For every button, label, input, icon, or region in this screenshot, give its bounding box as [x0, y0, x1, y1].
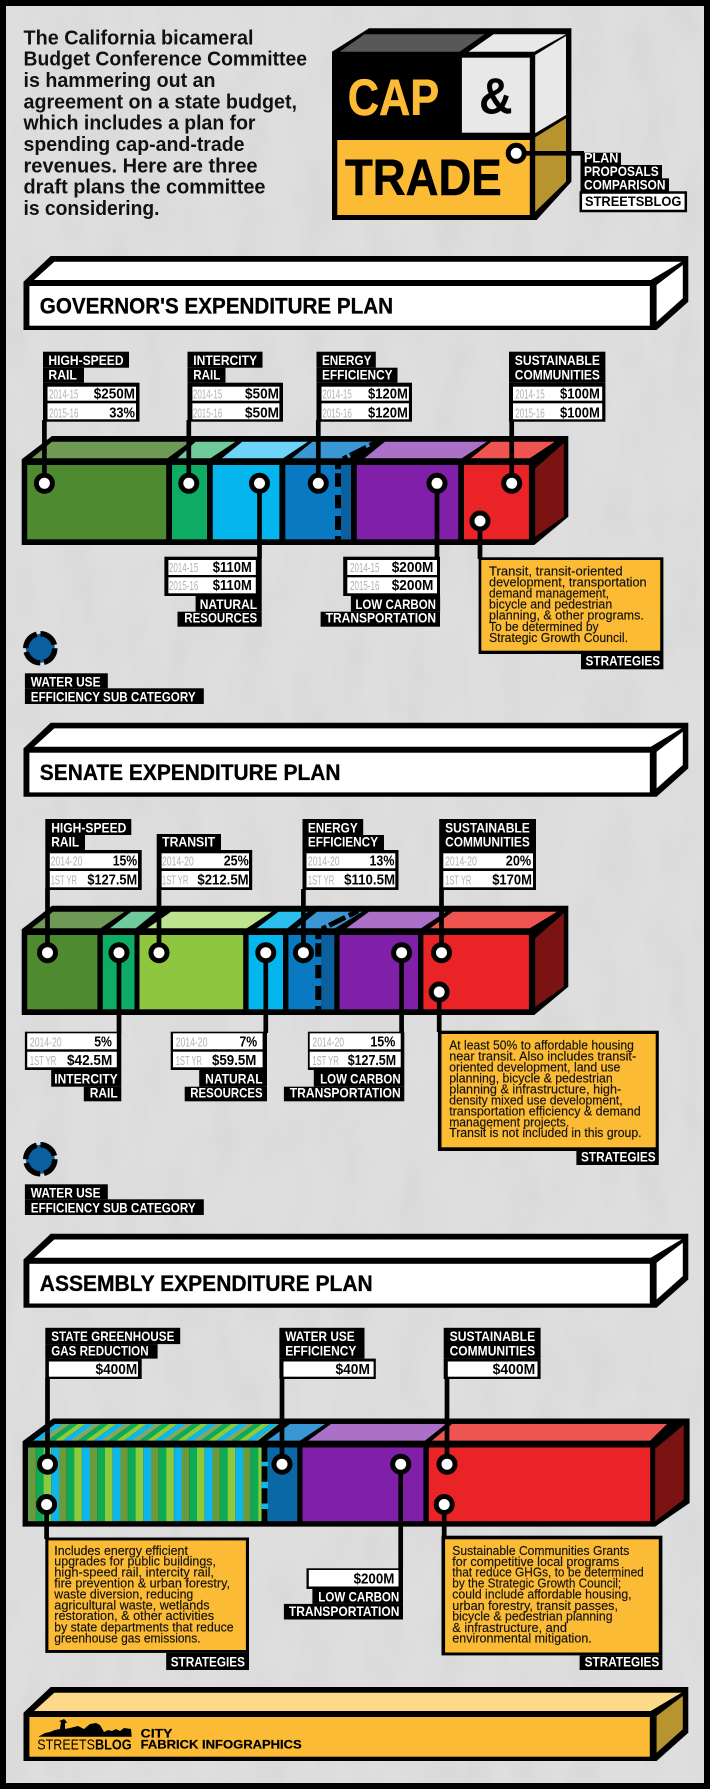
label: governor natural resources: 2015-16 [169, 578, 198, 593]
callout: governor strategies: To be determined by [489, 619, 599, 634]
callout: assembly greenhouse strategies: high-speed rail, intercity rail, [54, 1565, 214, 1580]
callout: senate strategies [438, 1031, 659, 1165]
callout: assembly sustainable communities strategies: STRATEGIES [585, 1653, 659, 1669]
label: senate natural resources: RESOURCES [190, 1085, 263, 1101]
footer credit text: CITY [141, 1726, 172, 1740]
intro text block: revenues. Here are three [24, 154, 258, 177]
label: senate natural resources: 2014-20 [176, 1035, 207, 1050]
label: senate energy efficiency [302, 819, 398, 890]
label: senate intercity rail: 1ST YR [30, 1053, 56, 1068]
label: senate natural resources: 7% [240, 1034, 257, 1051]
intro text block: is considering. [24, 197, 160, 220]
callout: assembly greenhouse strategies [45, 1538, 249, 1670]
chart: governor's plan bar [22, 420, 568, 559]
label: governor high-speed rail: RAIL [48, 366, 77, 382]
subtitle tags: plan proposals comparison streetsblog: COMPARISON [584, 176, 666, 192]
label: assembly sustainable communities: COMMUNITIES [450, 1342, 535, 1358]
label: senate transit [157, 834, 252, 890]
label: governor low carbon transportation: 2015-16 [350, 578, 379, 593]
label: senate sustainable communities: SUSTAINABLE [445, 819, 530, 835]
label: senate energy efficiency: $110.5M [344, 872, 395, 889]
label: governor high-speed rail: 2014-15 [49, 386, 78, 401]
callout: assembly sustainable communities strategies: urban forestry, transit passes, [452, 1598, 618, 1613]
label: senate low carbon transportation: TRANSPORTATION [290, 1085, 401, 1101]
intro text block: Budget Conference Committee [24, 48, 307, 71]
label: assembly water use efficiency: EFFICIENCY [285, 1342, 357, 1358]
label: assembly low carbon transportation [284, 1568, 403, 1620]
callout: senate strategies: planning & infrastructure, high- [449, 1081, 621, 1096]
heading: assembly expenditure plan [24, 1234, 688, 1308]
label: senate transit: $212.5M [197, 872, 249, 889]
footer logo: streetsblog skyline: BLOG [95, 1736, 132, 1753]
subtitle tags: plan proposals comparison streetsblog [580, 150, 686, 211]
callout: senate strategies: STRATEGIES [581, 1148, 656, 1164]
label: governor sustainable communities: COMMUNITIES [515, 366, 600, 382]
label: senate low carbon transportation [284, 1032, 404, 1101]
label: governor natural resources: RESOURCES [184, 610, 257, 626]
callout: assembly greenhouse strategies: upgrades for public buildings, [54, 1553, 216, 1568]
legend: water use efficiency sub category [25, 634, 204, 705]
label: governor low carbon transportation: $200M [392, 559, 433, 576]
subtitle tags: plan proposals comparison streetsblog: STREETSBLOG [585, 193, 681, 209]
label: assembly state greenhouse gas reduction: GAS REDUCTION [51, 1342, 149, 1358]
label: senate energy efficiency: 1ST YR [308, 873, 334, 888]
label: governor natural resources [164, 557, 262, 627]
callout: assembly sustainable communities strategies: & infrastructure, and [452, 1620, 567, 1635]
label: assembly state greenhouse gas reduction [45, 1328, 180, 1379]
label: senate energy efficiency: ENERGY [308, 819, 358, 835]
callout: assembly sustainable communities strategies: bicycle & pedestrian planning [452, 1609, 613, 1624]
label: senate high-speed rail: 1ST YR [51, 873, 77, 888]
label: senate transit: 2014-20 [162, 854, 194, 869]
title logo: cap and trade box: & [479, 67, 513, 124]
subtitle tags: plan proposals comparison streetsblog: PLAN [584, 150, 618, 166]
label: senate sustainable communities: COMMUNITIES [445, 834, 530, 850]
label: senate low carbon transportation: 15% [370, 1034, 395, 1051]
label: assembly sustainable communities: $400M [493, 1361, 535, 1378]
label: governor energy efficiency: 2015-16 [322, 405, 352, 420]
label: governor low carbon transportation [321, 557, 440, 627]
label: governor sustainable communities: 2014-15 [515, 386, 545, 401]
label: assembly state greenhouse gas reduction: STATE GREENHOUSE [51, 1328, 174, 1344]
callout: senate strategies: oriented development, land use [449, 1059, 620, 1074]
intro text block [23, 26, 307, 220]
label: senate energy efficiency: 13% [370, 853, 394, 870]
label: senate high-speed rail: $127.5M [87, 872, 137, 889]
label: senate sustainable communities: $170M [492, 872, 532, 889]
footer logo: streetsblog skyline: STREETS [37, 1736, 95, 1753]
label: assembly low carbon transportation: LOW CARBON [318, 1589, 399, 1605]
label: senate intercity rail [25, 1032, 121, 1101]
label: governor intercity rail: RAIL [193, 366, 221, 382]
label: senate high-speed rail: RAIL [51, 834, 80, 850]
label: governor intercity rail: $50M [245, 385, 279, 402]
title logo: cap and trade box [332, 28, 584, 220]
callout: assembly sustainable communities strategies: by the Strategic Growth Council; [452, 1576, 621, 1591]
intro text block: which includes a plan for [23, 112, 256, 135]
label: governor sustainable communities: $100M [560, 385, 600, 402]
footer logo: streetsblog skyline [37, 1719, 132, 1753]
label: governor low carbon transportation: $200M [392, 577, 433, 594]
callout: assembly greenhouse strategies: restoration, & other activities [54, 1608, 215, 1623]
intro text block: spending cap-and-trade [24, 133, 244, 156]
callout: governor strategies: demand management, [489, 586, 609, 601]
label: governor high-speed rail: $250M [94, 385, 135, 402]
callout: assembly greenhouse strategies: waste diversion, reducing [53, 1586, 193, 1601]
callout: assembly greenhouse strategies: Includes energy efficient [54, 1543, 188, 1558]
label: governor energy efficiency: 2014-15 [322, 386, 352, 401]
label: assembly state greenhouse gas reduction: $400M [96, 1361, 137, 1378]
callout: governor strategies: planning, & other programs. [489, 607, 644, 622]
callout: assembly sustainable communities strategies: Sustainable Communities Grants [452, 1543, 630, 1558]
label: governor low carbon transportation: TRANSPORTATION [326, 610, 436, 626]
callout: senate strategies: near transit. Also includes transit- [449, 1049, 636, 1064]
heading: governor's expenditure plan: GOVERNOR'S EXPENDITURE PLAN [40, 293, 393, 318]
callout: assembly sustainable communities strategies: that reduce GHGs, to be determined [452, 1565, 644, 1580]
legend: water use efficiency sub category (senate): EFFICIENCY SUB CATEGORY [31, 1199, 196, 1215]
callout: assembly sustainable communities strategies: could include affordable housing, [452, 1586, 632, 1601]
label: governor low carbon transportation: 2014-15 [350, 560, 379, 575]
heading: assembly expenditure plan: ASSEMBLY EXPENDITURE PLAN [40, 1271, 373, 1296]
label: governor natural resources: $110M [213, 577, 252, 594]
footer credit text [141, 1726, 302, 1751]
callout: senate strategies: Transit is not included in this group. [449, 1125, 642, 1140]
callout: assembly greenhouse strategies: agricultural waste, wetlands [54, 1597, 210, 1612]
callout: senate strategies: management projects. [449, 1115, 569, 1130]
intro text block: draft plans the committee [24, 176, 266, 199]
callout: assembly sustainable communities strategies: for competitive local programs [452, 1554, 620, 1569]
label: senate intercity rail: RAIL [90, 1085, 118, 1101]
label: assembly water use efficiency: WATER USE [285, 1328, 355, 1344]
label: senate transit: 25% [224, 853, 249, 870]
label: assembly low carbon transportation: $200M [354, 1571, 394, 1588]
chart: senate plan bar [22, 889, 568, 1033]
label: governor sustainable communities: $100M [560, 404, 600, 421]
label: governor energy efficiency: ENERGY [322, 352, 372, 368]
callout: assembly greenhouse strategies: greenhouse gas emissions. [54, 1631, 201, 1646]
label: governor natural resources: $110M [213, 559, 252, 576]
legend: water use efficiency sub category (senate) [25, 1145, 204, 1215]
label: assembly water use efficiency [279, 1328, 376, 1379]
legend: water use efficiency sub category: WATER USE [31, 674, 100, 690]
heading: governor's expenditure plan [24, 256, 688, 330]
callout: senate strategies: density mixed use development, [449, 1092, 623, 1107]
footer credit text: FABRICK INFOGRAPHICS [141, 1737, 302, 1751]
label: governor energy efficiency [316, 352, 412, 422]
chart: assembly plan bar [23, 1378, 690, 1570]
callout: assembly sustainable communities strategies: environmental mitigation. [452, 1631, 592, 1646]
label: governor natural resources: NATURAL [200, 596, 258, 612]
label: senate low carbon transportation: 2014-20 [312, 1035, 344, 1050]
label: governor high-speed rail: 33% [109, 404, 135, 421]
callout: assembly greenhouse strategies: fire prevention & urban forestry, [54, 1576, 230, 1591]
label: senate natural resources: $59.5M [212, 1052, 256, 1069]
label: governor intercity rail: INTERCITY [193, 352, 258, 368]
label: senate sustainable communities: 20% [506, 853, 531, 870]
heading: senate expenditure plan: SENATE EXPENDITURE PLAN [40, 760, 341, 785]
label: governor sustainable communities [509, 352, 605, 422]
label: governor intercity rail: 2014-15 [193, 386, 222, 401]
label: senate low carbon transportation: LOW CARBON [320, 1070, 401, 1086]
intro text block: The California bicameral [24, 26, 254, 49]
label: governor energy efficiency: $120M [368, 404, 408, 421]
label: governor low carbon transportation: LOW CARBON [355, 596, 436, 612]
intro text block: is hammering out an [24, 69, 216, 92]
label: senate intercity rail: INTERCITY [54, 1070, 118, 1086]
label: senate sustainable communities: 1ST YR [445, 873, 471, 888]
legend: water use efficiency sub category: EFFICIENCY SUB CATEGORY [31, 689, 196, 705]
label: governor high-speed rail: 2015-16 [49, 405, 78, 420]
label: senate intercity rail: 2014-20 [30, 1035, 62, 1050]
label: assembly water use efficiency: $40M [336, 1361, 370, 1378]
heading: senate expenditure plan [24, 723, 688, 797]
label: senate high-speed rail: HIGH-SPEED [51, 819, 126, 835]
label: assembly sustainable communities [444, 1328, 541, 1379]
label: senate high-speed rail: 2014-20 [51, 854, 82, 869]
callout: assembly sustainable communities strategies [442, 1536, 662, 1670]
callout: senate strategies: transportation efficiency & demand [449, 1103, 641, 1118]
label: senate natural resources [171, 1032, 267, 1101]
label: governor intercity rail: 2015-16 [193, 405, 222, 420]
legend: water use efficiency sub category (senate): WATER USE [31, 1185, 100, 1201]
callout: governor strategies: Transit, transit-oriented [489, 563, 623, 578]
label: senate high-speed rail [45, 819, 142, 890]
callout: senate strategies: At least 50% to affordable housing [449, 1037, 634, 1052]
callout: governor strategies: STRATEGIES [586, 653, 660, 669]
label: governor energy efficiency: EFFICIENCY [322, 366, 393, 382]
label: senate intercity rail: 5% [94, 1034, 112, 1051]
subtitle tags: plan proposals comparison streetsblog: PROPOSALS [584, 163, 659, 179]
label: senate energy efficiency: 2014-20 [308, 854, 340, 869]
label: senate low carbon transportation: 1ST YR [312, 1053, 339, 1068]
callout: assembly greenhouse strategies: by state departments that reduce [54, 1620, 234, 1634]
label: senate intercity rail: $42.5M [67, 1052, 112, 1069]
callout: governor strategies: development, transportation [489, 575, 647, 590]
label: senate sustainable communities: 2014-20 [445, 854, 477, 869]
label: senate energy efficiency: EFFICIENCY [308, 834, 379, 850]
label: senate natural resources: 1ST YR [176, 1053, 202, 1068]
label: senate natural resources: NATURAL [205, 1070, 263, 1086]
label: senate transit: 1ST YR [162, 873, 188, 888]
callout: senate strategies: planning, bicycle & pedestrian [449, 1070, 613, 1085]
label: assembly low carbon transportation: TRANSPORTATION [289, 1603, 399, 1619]
label: senate low carbon transportation: $127.5M [348, 1052, 396, 1069]
label: senate transit: TRANSIT [162, 834, 215, 850]
title logo: cap and trade box: CAP [348, 69, 439, 126]
label: assembly sustainable communities: SUSTAINABLE [450, 1328, 535, 1344]
callout: governor strategies: Strategic Growth Council. [489, 630, 628, 645]
label: governor sustainable communities: 2015-16 [515, 405, 545, 420]
title logo: cap and trade box: TRADE [345, 149, 502, 206]
label: senate high-speed rail: 15% [113, 853, 137, 870]
callout: assembly greenhouse strategies: STRATEGIES [171, 1653, 245, 1669]
label: governor high-speed rail: HIGH-SPEED [48, 352, 124, 368]
label: governor sustainable communities: SUSTAINABLE [515, 352, 600, 368]
footer bar [24, 1687, 688, 1761]
callout: governor strategies [479, 557, 663, 669]
label: governor intercity rail: $50M [245, 404, 279, 421]
callout: governor strategies: bicycle and pedestrian [489, 597, 612, 612]
intro text block: agreement on a state budget, [24, 90, 297, 113]
label: governor intercity rail [188, 352, 283, 422]
label: governor energy efficiency: $120M [368, 385, 408, 402]
label: governor high-speed rail [43, 352, 140, 422]
label: governor natural resources: 2014-15 [169, 560, 198, 575]
label: senate sustainable communities [439, 819, 536, 890]
